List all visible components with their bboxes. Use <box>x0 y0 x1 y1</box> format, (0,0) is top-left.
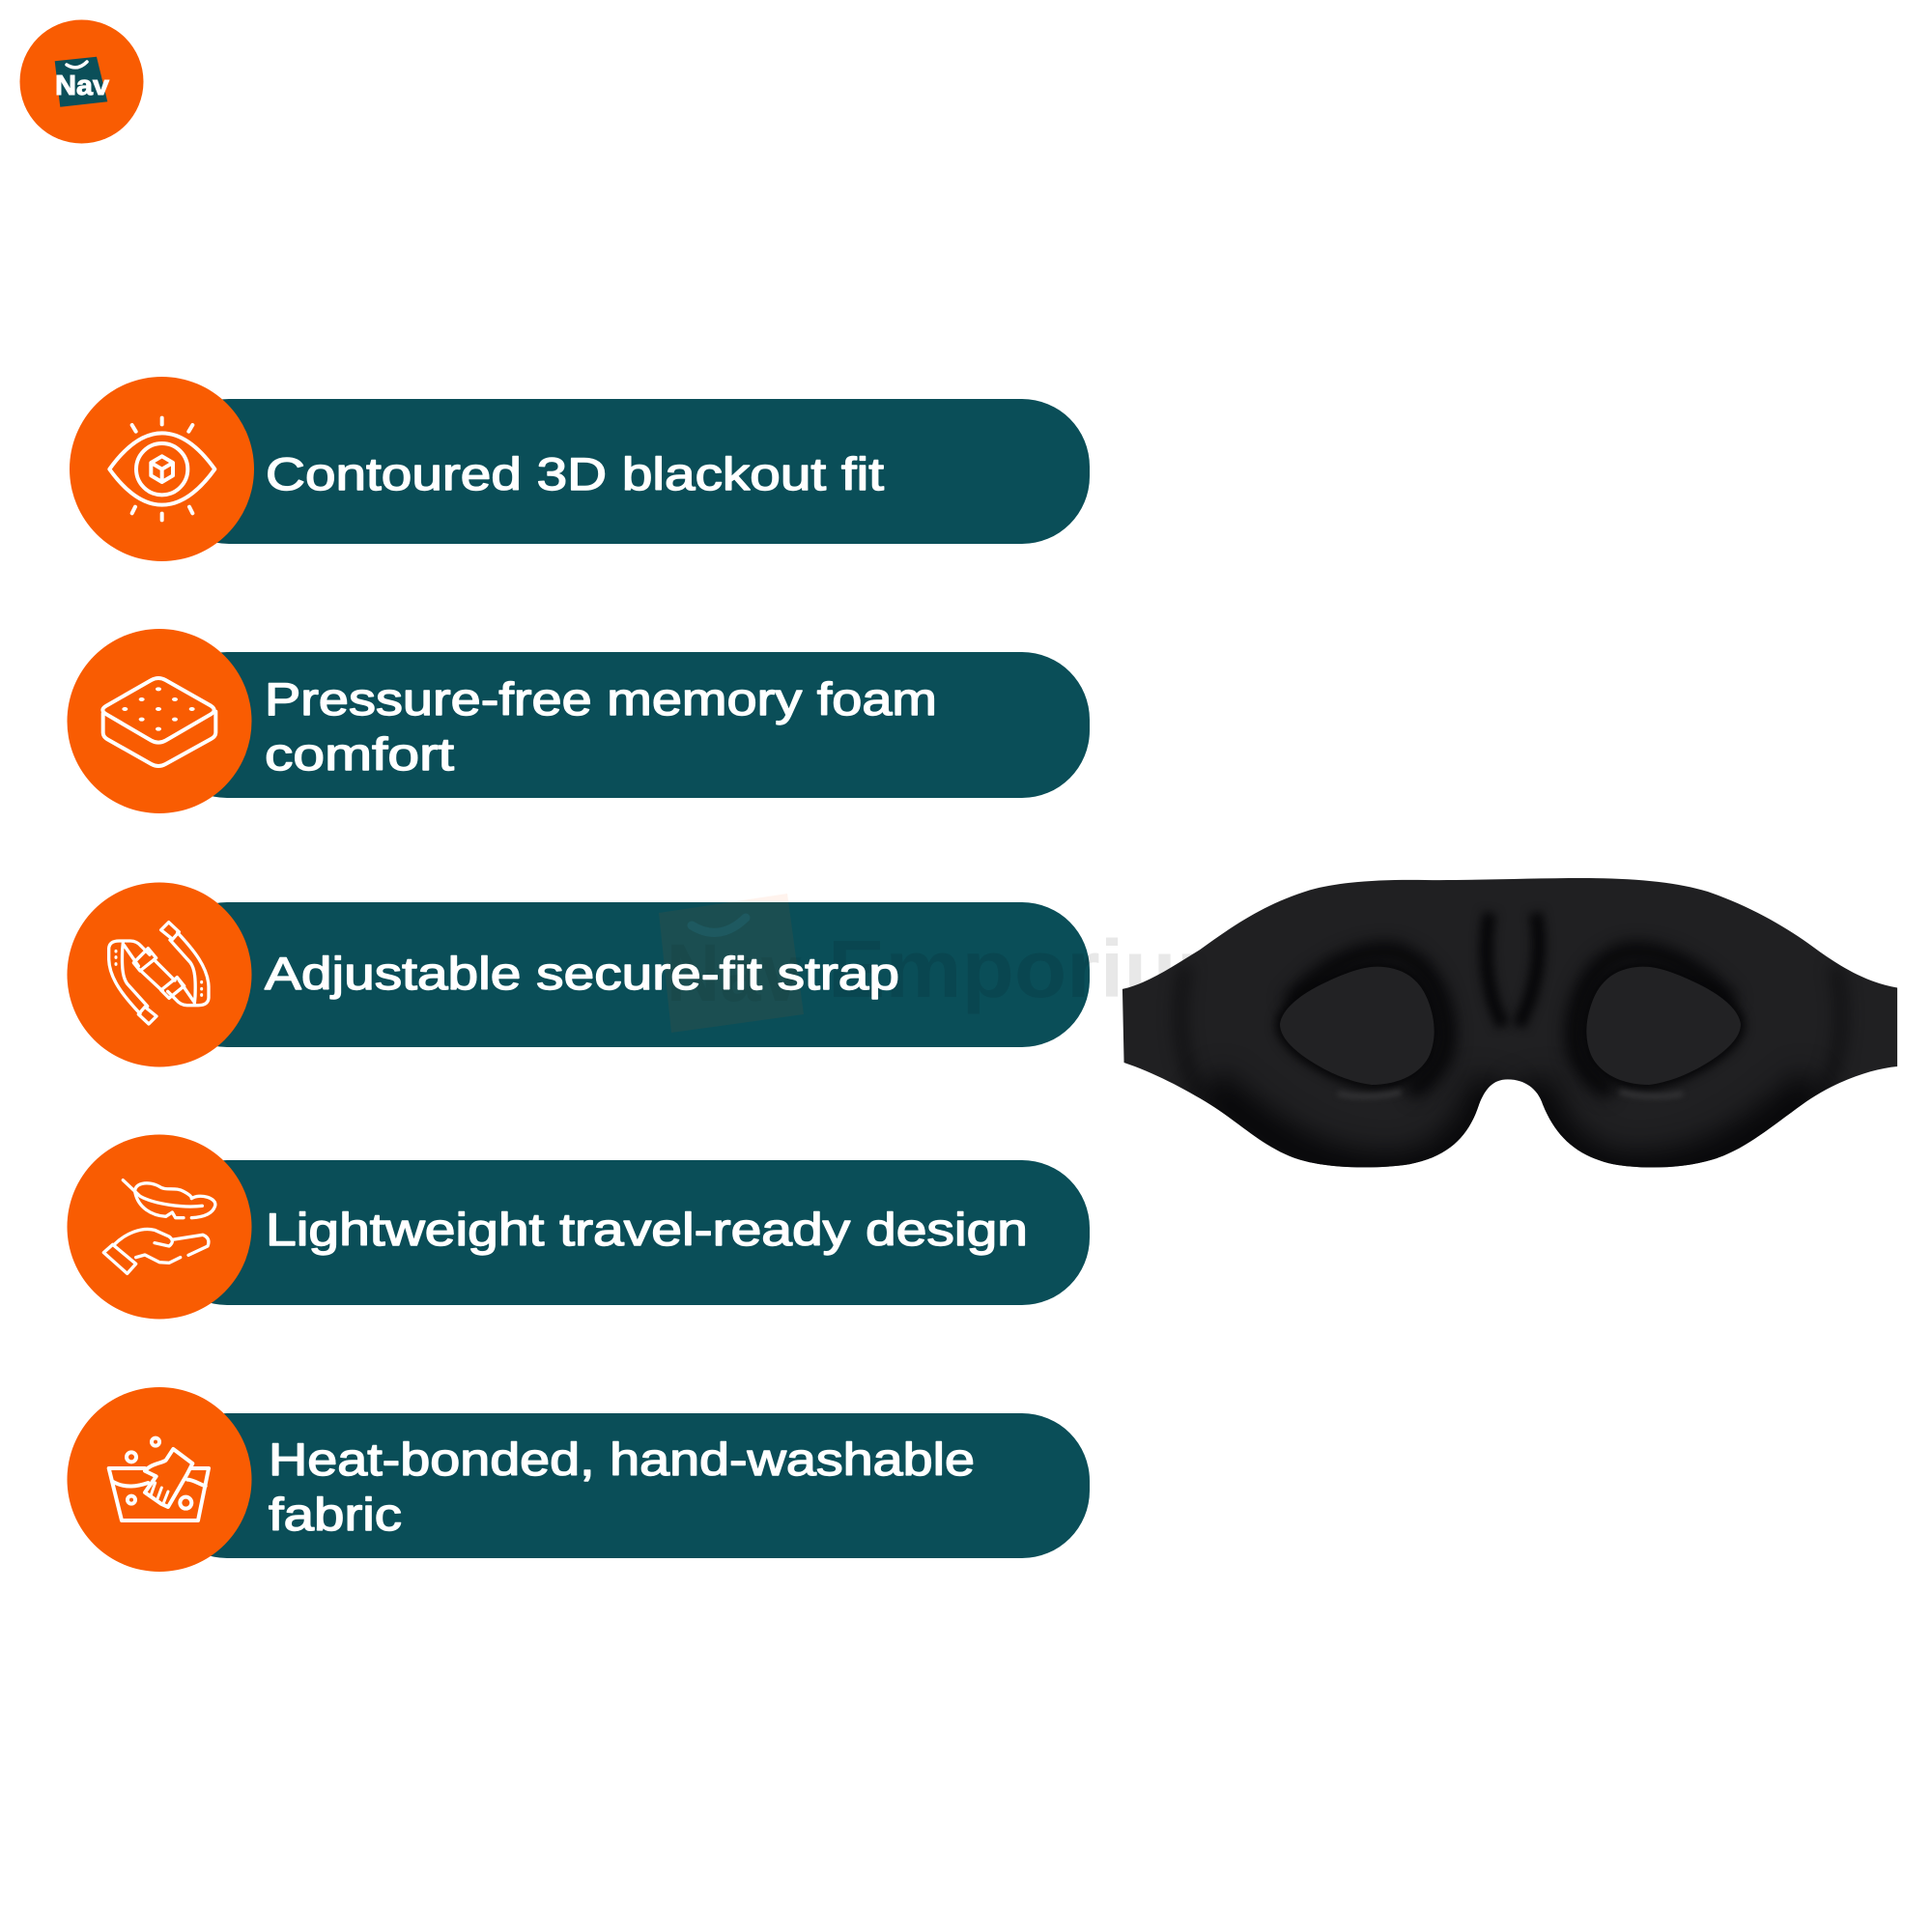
right socket ring <box>1586 967 1741 1085</box>
nose ridge grooves <box>1486 913 1503 1026</box>
feature text 2: Pressure-free memory foam <box>265 673 937 724</box>
feature text 2 <box>265 673 937 780</box>
feature text 3: Adjustable secure-fit strap <box>265 948 899 999</box>
feature bar 1 <box>161 399 1090 544</box>
feature text 5 <box>269 1434 975 1540</box>
feature bar 2 <box>159 652 1090 798</box>
watermark: Nav Emporium <box>659 894 1253 1033</box>
logo badge: Nav <box>19 19 143 143</box>
icon circle 3: adjustable strap <box>68 883 251 1066</box>
left socket ring <box>1280 967 1435 1085</box>
right socket shadow <box>1575 952 1731 1092</box>
feature bar 3 <box>159 902 1090 1047</box>
feature text 2: comfort <box>265 728 454 780</box>
icon circle 1: eye with cube <box>70 377 254 561</box>
product photo: contoured sleep mask <box>1122 878 1897 1174</box>
feature text 4: Lightweight travel-ready design <box>266 1204 1028 1255</box>
left eye pad <box>1280 967 1435 1085</box>
right eye pad <box>1586 967 1741 1085</box>
feature bar 4 <box>159 1160 1090 1305</box>
feature bar 5 <box>159 1413 1090 1558</box>
watermark: Nav Emporium: Emporium <box>828 923 1253 1014</box>
icon circle 5: hand washing basin <box>68 1387 251 1572</box>
feature text 5: Heat-bonded, hand-washable <box>269 1434 975 1485</box>
logo badge: Nav: Nav <box>55 71 109 101</box>
watermark: Nav Emporium: Nav <box>667 927 802 1018</box>
cheek highlights <box>1338 1092 1401 1096</box>
mask shading <box>1180 913 1841 1174</box>
icon circle 2: memory foam block <box>68 629 251 813</box>
feature text 5: fabric <box>269 1489 402 1540</box>
mask body <box>1122 878 1897 1168</box>
left socket shadow <box>1290 952 1446 1092</box>
icon circle 4: feather over hand <box>68 1134 251 1320</box>
feature text 1: Contoured 3D blackout fit <box>266 448 884 499</box>
